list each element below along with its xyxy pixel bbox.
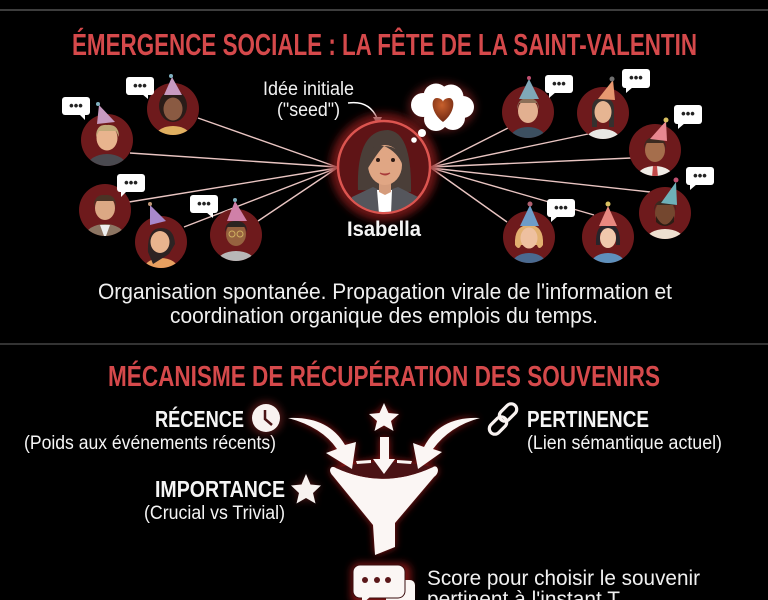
- text block: summary of social emergence: [98, 279, 673, 328]
- label: importance: IMPORTANCE: [155, 476, 285, 502]
- speech bubble: [190, 195, 218, 218]
- avatar: guest right 6: [582, 202, 634, 263]
- avatar: guest right 3: [629, 118, 681, 176]
- speech bubble: [545, 75, 573, 98]
- avatar: guest right 1: [502, 76, 554, 138]
- avatar: guest right 5: [503, 202, 555, 263]
- text block: score: [427, 567, 700, 600]
- avatar: guest right 4: [639, 178, 691, 239]
- avatar: guest left 2: [81, 102, 133, 166]
- icon: chat bubbles: [351, 563, 415, 600]
- label: importance: [144, 476, 285, 524]
- speech bubble: •••: [197, 196, 211, 211]
- label: recency: [24, 405, 276, 454]
- speech bubble: •••: [552, 76, 566, 91]
- speech bubble: [622, 69, 650, 93]
- avatar: guest left 3: [79, 184, 131, 236]
- arrow: left into funnel: [288, 418, 356, 469]
- arrow: centre into funnel: [373, 437, 395, 474]
- central avatar: Isabella: [330, 113, 438, 221]
- label: recency: RÉCENCE: [155, 405, 244, 432]
- label: importance: (Crucial vs Trivial): [144, 503, 285, 524]
- avatar: guest left 1: [147, 74, 199, 135]
- text block: summary of social emergence: coordination organique des emplois du temps.: [170, 303, 598, 328]
- icon: star importance: [291, 474, 321, 504]
- icon: clock: [249, 401, 283, 435]
- arrow: right into funnel: [413, 418, 480, 469]
- icon: star relevance: [369, 403, 399, 431]
- label: relevance: [527, 406, 722, 454]
- speech bubble: •••: [629, 70, 643, 85]
- arrow: seed to Isabella: [348, 103, 382, 125]
- funnel body: [330, 466, 438, 555]
- thought bubble: heart: [408, 82, 476, 143]
- annotation: seed idea: Idée initiale: [263, 79, 354, 100]
- speech bubble: •••: [69, 98, 83, 113]
- funnel with arrows and star: [288, 403, 480, 555]
- speech bubble: [686, 167, 714, 190]
- funnel inner: [336, 462, 433, 479]
- icon: link: [487, 402, 519, 436]
- speech bubble: [62, 97, 90, 120]
- annotation: seed idea: ("seed"): [277, 100, 340, 121]
- avatar: guest left 4: [135, 202, 187, 268]
- speech bubble: [674, 105, 702, 129]
- speech bubble: •••: [554, 200, 568, 215]
- text block: score: Score pour choisir le souvenir: [427, 567, 700, 590]
- text block: summary of social emergence: Organisation spontanée. Propagation virale de l'information et: [98, 279, 673, 304]
- avatar: guest left 5: [210, 198, 262, 261]
- label: relevance: (Lien sémantique actuel): [527, 433, 722, 454]
- speech bubble: [126, 77, 154, 99]
- speech bubble: •••: [133, 78, 147, 93]
- speech bubble: •••: [693, 168, 707, 183]
- speech bubble: •••: [124, 175, 138, 190]
- label: recency: (Poids aux événements récents): [24, 433, 276, 454]
- speech bubble: [547, 199, 575, 222]
- speech bubble: [117, 174, 145, 197]
- label: Isabella: Isabella: [347, 218, 421, 241]
- propagation lines: [129, 118, 650, 227]
- annotation: seed idea: [263, 79, 354, 121]
- speech bubble: •••: [681, 106, 695, 121]
- label: relevance: PERTINENCE: [527, 406, 649, 432]
- avatar: guest right 2: [577, 76, 629, 139]
